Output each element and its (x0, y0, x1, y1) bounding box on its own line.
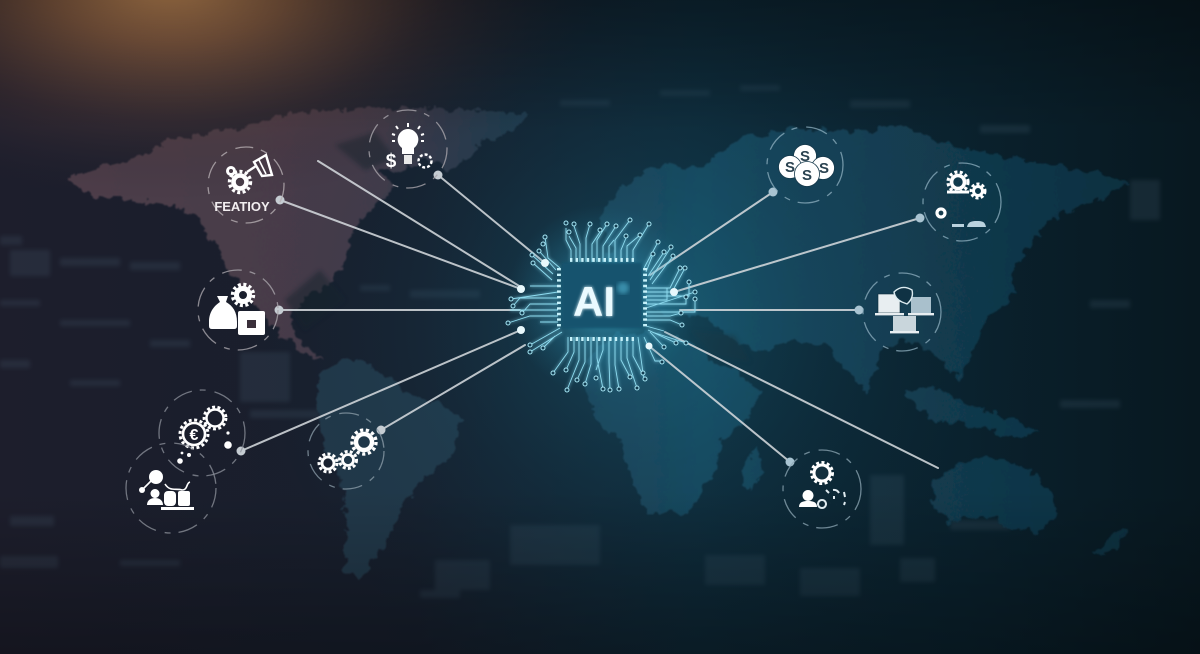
connector lines (241, 161, 938, 468)
coin symbols: S (785, 159, 795, 176)
machine (161, 491, 194, 510)
orange light flare (0, 0, 700, 300)
North America and Greenland (66, 108, 532, 362)
droplets (177, 431, 232, 464)
bulb base (404, 155, 412, 164)
Australia (932, 458, 1058, 534)
helmet (894, 287, 912, 304)
chip card mark (247, 320, 256, 328)
icon: person with gear (783, 450, 861, 528)
euro sign: € (190, 427, 199, 444)
person (147, 489, 163, 505)
node links (142, 477, 190, 490)
dashed ring (863, 273, 941, 351)
New Zealand (1096, 530, 1126, 558)
coin stack (778, 144, 834, 186)
gear icon (228, 155, 272, 192)
icon: gears and people (923, 163, 1001, 241)
dashed ring (198, 270, 278, 350)
icon: gears and label (208, 147, 284, 223)
map darkening patches (285, 132, 750, 362)
coin symbols: S (800, 148, 810, 165)
circuit traces (508, 220, 695, 390)
chip card (238, 311, 265, 335)
coin symbols (785, 148, 829, 184)
world map (66, 108, 1130, 576)
wrench node (149, 470, 163, 484)
dashed ring (208, 147, 284, 223)
lower laptop (893, 316, 916, 331)
euro gear (183, 423, 205, 445)
right laptop base (908, 313, 934, 315)
dashed ring (783, 450, 861, 528)
bulb (398, 129, 418, 154)
South America (316, 360, 462, 576)
dashed ring (126, 443, 216, 533)
icon: laptops (863, 273, 941, 351)
user (952, 221, 986, 227)
chip body (562, 263, 642, 328)
gear (236, 288, 250, 302)
right laptop (911, 297, 931, 313)
money bag (209, 296, 237, 329)
dashed ring (308, 413, 384, 489)
icon: money bag and gear (198, 270, 278, 350)
icon: euro gears (159, 390, 245, 476)
icon: three gears (308, 413, 384, 489)
gear (814, 465, 830, 481)
icon: coins (767, 127, 843, 203)
dotted orbit (818, 490, 845, 508)
Africa (584, 332, 762, 514)
Southeast Asia islands (905, 385, 1040, 438)
icon: light bulb (369, 110, 447, 188)
large gear (947, 172, 969, 192)
coin symbols: S (819, 160, 829, 177)
small gear (971, 184, 985, 198)
garbled label: FEATIOY (214, 199, 270, 214)
person (799, 490, 817, 507)
dollar sign: $ (386, 151, 397, 172)
dashed ring (369, 110, 447, 188)
AI chip with circuit traces (506, 205, 697, 395)
coin symbols: S (802, 167, 812, 184)
left laptop (878, 294, 900, 313)
chip glow (507, 205, 697, 395)
Madagascar (742, 448, 762, 492)
background blurred city lights (0, 85, 1160, 598)
bulb rays (392, 123, 424, 141)
circuit terminals (506, 218, 697, 392)
icon: person and network (126, 443, 216, 533)
dashed ring (923, 163, 1001, 241)
node (937, 209, 945, 217)
left laptop base (875, 313, 904, 315)
dashed ring (767, 127, 843, 203)
AI label: AI (573, 278, 615, 325)
dashed ring (159, 390, 245, 476)
chip pins (559, 260, 645, 339)
teal central glow (200, 0, 1100, 654)
connector end dots (236, 170, 924, 466)
gears (319, 430, 376, 472)
chip highlight (617, 282, 629, 294)
lower laptop base (890, 331, 919, 333)
Eurasia (590, 128, 1130, 392)
dotted gear (418, 154, 432, 168)
small node (139, 487, 145, 493)
small gear (206, 410, 224, 426)
